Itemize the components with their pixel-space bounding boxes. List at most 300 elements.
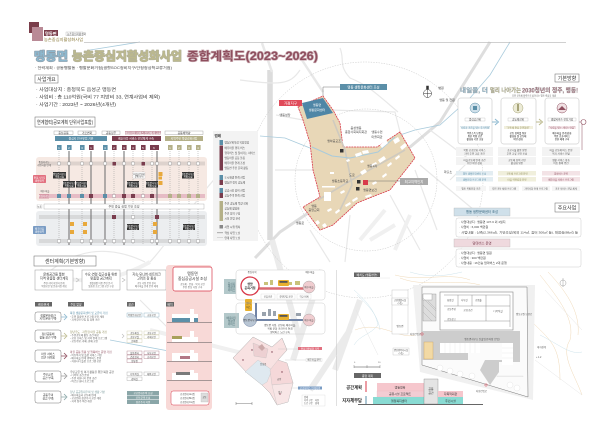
upper route box: 학교 연계 bbox=[299, 294, 309, 298]
county map: 금왕 bbox=[277, 377, 282, 381]
header logo: 농촌중심지활성화사업 bbox=[44, 37, 84, 42]
upper black label boxes: 복합시설 bbox=[184, 174, 192, 178]
row 2 bbox=[35, 330, 159, 343]
stack left bbox=[373, 383, 424, 404]
place names: 맹동초등학교 bbox=[332, 178, 349, 183]
upper black label boxes: 주민조직 bbox=[135, 174, 143, 178]
icon: bus bbox=[278, 314, 289, 320]
row 3: 마을 서비스 bbox=[41, 352, 55, 356]
lower route box: 맹동면사무소 bbox=[243, 318, 258, 322]
concept box 2 bbox=[82, 270, 120, 290]
upper route box: 배후마을 bbox=[306, 270, 315, 274]
chart bands bbox=[39, 162, 205, 243]
label: base district: 거점지구 bbox=[284, 101, 298, 106]
column headers bbox=[54, 131, 203, 141]
concept box 2: 생활권별 이용 주민 분석 bbox=[89, 281, 113, 285]
heading bbox=[354, 373, 381, 378]
panel: site plan bbox=[354, 272, 582, 400]
row 3: 정류장 bbox=[131, 359, 139, 363]
column headers: 공동체역량 bbox=[178, 131, 191, 135]
project details 1 bbox=[456, 218, 581, 237]
top number tags: 3 bbox=[81, 146, 83, 150]
site plan map: project area bbox=[279, 84, 455, 230]
main building: 공용홀 bbox=[475, 298, 482, 302]
card 1: 활성화 기반 조성 bbox=[467, 137, 483, 141]
legend entries: 맹동면 주민 문화 활동 bbox=[224, 166, 249, 170]
adjacent building: 맹동면 bbox=[397, 324, 404, 328]
column headers: 중심지 인구유입 기반 bbox=[69, 136, 94, 140]
legend entries: 맹동면 행복 공동체 bbox=[224, 180, 246, 184]
slogan: 2030청년의 정주, 맹동! bbox=[522, 86, 578, 94]
panel: center plan bbox=[34, 256, 212, 410]
legend panel bbox=[213, 131, 258, 241]
small labels: upper rows bbox=[37, 160, 51, 198]
baseline bbox=[358, 403, 483, 406]
site parcel bbox=[422, 287, 528, 397]
row 3: - 커뮤니티 돌봄 프로그램 공간 bbox=[70, 359, 102, 363]
label: base district bbox=[279, 100, 302, 106]
site plan map: project area: 생활문화센터 bbox=[309, 107, 326, 112]
legend entries: 공동체 활성화 bbox=[224, 206, 240, 210]
project details 2: · 사업비 : 300 백만원 bbox=[459, 255, 486, 260]
card 2 bbox=[501, 98, 536, 144]
row 4: 다목적실 bbox=[130, 372, 139, 376]
upper route box: 문화거점 bbox=[244, 285, 256, 290]
center concept box: 맹동면 bbox=[187, 271, 198, 276]
side label: upper: 중심시가지 bbox=[34, 176, 45, 180]
title: 농촌중심지활성화사업 bbox=[72, 49, 182, 63]
row 5: - 지역 정주 여건 개선 bbox=[70, 399, 93, 403]
row 4: 체육공간 bbox=[147, 372, 157, 376]
row 3: 사무공간 bbox=[147, 351, 157, 355]
overview text: · 사업기간 : 2023년 ~ 2026년(4개년) bbox=[36, 101, 117, 108]
legend entries: 시설 운영 관리 bbox=[224, 216, 241, 220]
side label: lower: 생활권역 bbox=[35, 230, 44, 234]
legend entries: 맹동문화복합 복합행정 bbox=[224, 140, 250, 144]
tag: rear service: 생활권 bbox=[228, 319, 236, 323]
heading: linkage plan: 연계협력(공모계획 단위사업포함) bbox=[37, 119, 93, 126]
overview text: · 사업대상지 : 충청북도 음성군 맹동면 bbox=[36, 86, 116, 93]
lower route box: 복합 문화 공간으로 연결 bbox=[267, 326, 293, 330]
card 2: 활성화 및 공동체 bbox=[510, 134, 526, 138]
top number tags: 4 bbox=[132, 146, 134, 150]
upper black label boxes: 복합시설 bbox=[55, 174, 64, 178]
panel: basic direction bbox=[456, 74, 586, 191]
scale bar bbox=[236, 402, 252, 405]
place names bbox=[279, 85, 455, 225]
row 4: 주민교류 및 여가 활동을 위한 복합 공간 bbox=[70, 370, 115, 374]
legend entries: 도시재생 연계 사업 bbox=[224, 176, 246, 180]
direction boxes: 활성화 방안 bbox=[511, 161, 524, 165]
direction boxes: 공공시설 활용 방안 bbox=[507, 148, 528, 152]
small labels: upper rows: 중심지기능 bbox=[38, 194, 50, 198]
heading: 종합 계획 bbox=[362, 374, 373, 378]
upper band nodes bbox=[57, 162, 200, 198]
row 2: - 주민공동체 활동 공간 제공 bbox=[70, 333, 100, 337]
upper black label boxes: 복합시설 bbox=[129, 184, 137, 188]
middle white bar: 주민 중심 실행 기반 조성 bbox=[109, 204, 140, 209]
action rows: 생활문화 프로그램 운영 bbox=[463, 177, 486, 181]
action rows: 맹동 생활문화센터 조성 bbox=[463, 171, 486, 175]
bus link tag: 맘마 bbox=[246, 301, 251, 305]
title: 맹동면 bbox=[34, 50, 68, 63]
tag: center service bbox=[224, 279, 239, 294]
small labels: upper rows: 배후마을 bbox=[41, 189, 50, 193]
concept box 3: 배후마을 연계 운영 체계 bbox=[135, 284, 158, 288]
side label: upper bbox=[33, 175, 46, 183]
place names: 맹하공교조 bbox=[327, 138, 341, 143]
row 5: 청년 공공임대주택 및 생활 기반 bbox=[70, 390, 106, 394]
row 1: - 지역주민 모임 및 회의 공간 bbox=[70, 318, 100, 322]
stack center: 공동 bbox=[428, 387, 434, 391]
heading: linkage plan bbox=[35, 117, 95, 127]
lower route box: 배후마을 bbox=[304, 318, 314, 322]
concept box 2: 맞춤형 프로그램 공간 구성 bbox=[88, 284, 114, 288]
legend entries: 주민 협의 구성 bbox=[224, 212, 241, 216]
top number tags: 3 bbox=[188, 146, 190, 150]
project details 1: · 사업대상지 : 맹동면 137-6 외 4필지 bbox=[459, 219, 506, 224]
row 4 bbox=[35, 370, 159, 383]
row 5: 공공임대주택 조성 bbox=[133, 391, 153, 395]
concept box 1: 문화공간을 통한 bbox=[43, 272, 65, 276]
column headers: 중심공동 bbox=[58, 131, 69, 135]
label: highest area bbox=[368, 178, 428, 185]
housing summary box: 공동 bbox=[202, 395, 207, 399]
legend panel: 범례 bbox=[214, 133, 221, 138]
contour lines bbox=[354, 272, 582, 395]
icon: site north bbox=[560, 278, 566, 287]
housing summary box bbox=[171, 391, 209, 405]
project band 2: 맘마버스 운영 bbox=[472, 240, 492, 246]
main building: 공유공간 bbox=[463, 308, 473, 312]
direction boxes: 복지 서비스 전달 bbox=[552, 152, 570, 156]
row 2: 활동 공간 부족 bbox=[40, 336, 57, 340]
map callouts: 배후마을권역 bbox=[307, 358, 321, 362]
upper route box: 생활 bbox=[247, 281, 253, 286]
top number tags: 4 bbox=[197, 146, 199, 150]
place names: 마을회관 bbox=[371, 134, 383, 139]
site plan labels: 차량진입로 bbox=[410, 332, 422, 336]
row 4: 주민교류 bbox=[43, 372, 54, 376]
place names: 맹동로 bbox=[296, 220, 304, 225]
row 4: 강의실 bbox=[131, 377, 138, 381]
row 1 bbox=[35, 311, 159, 322]
lower labels: 맹동면사무소 bbox=[182, 224, 196, 228]
row 2: 청년공동체 bbox=[42, 332, 55, 336]
tag: center service: 서비스 bbox=[228, 288, 236, 292]
row 1: 복합 생활문화센터 및 교류의 거점 bbox=[70, 311, 108, 315]
tag: rear service: 배후마을 bbox=[227, 316, 237, 320]
upper black label boxes: 마을공동체 bbox=[134, 172, 144, 176]
concept arrow 1 bbox=[76, 278, 79, 282]
overview text: · 사업비 : 총 110억원(국비 77 지방비 33, 연계사업비 제외) bbox=[36, 94, 161, 100]
main building: 화장실 bbox=[447, 298, 454, 302]
card 2: 역량 강화 bbox=[513, 137, 524, 141]
heading: center plan bbox=[34, 256, 96, 266]
side label: local budget: 지자체부담 bbox=[342, 397, 362, 404]
housing summary box: 공공임대 B타입 bbox=[180, 396, 195, 400]
perimeter roads bbox=[413, 285, 535, 400]
parking area: 맹동면사무소 진출입(주차장 진입) bbox=[464, 337, 500, 341]
overview text bbox=[36, 86, 161, 108]
title bbox=[34, 49, 318, 63]
map legend: 지역 구분 bbox=[304, 398, 313, 402]
top number tags: 2 bbox=[113, 146, 115, 150]
upper black label boxes: 맹동면사무소 bbox=[62, 181, 76, 185]
upper black label boxes: 맹동면사무소 bbox=[126, 181, 140, 185]
direction boxes: 마을공동체 연계 공간 bbox=[463, 158, 486, 162]
direction boxes bbox=[456, 147, 580, 165]
main building bbox=[440, 292, 513, 330]
card 2: 공동 참여를 통한 bbox=[510, 131, 527, 135]
upper pink panel bbox=[36, 157, 207, 201]
row 1: 지역 문화 부족 bbox=[40, 317, 57, 321]
upper black label boxes bbox=[53, 172, 195, 188]
tag: center service: 중심지 bbox=[228, 282, 236, 286]
column labels: 배경/문제 bbox=[38, 302, 49, 306]
county map: 생극 bbox=[278, 390, 282, 394]
tag: center service: 생활권 bbox=[228, 285, 236, 289]
legend entries: 행복버스 및 찾아가는 서비스 bbox=[224, 151, 256, 155]
concept box 1 bbox=[35, 270, 73, 290]
row 5: - 공공임대 청년주거 공간 계획 bbox=[70, 396, 101, 400]
place names: 맹동수련 bbox=[371, 129, 383, 134]
small labels: upper rows: 중심지기능 bbox=[38, 160, 50, 164]
upper route box: 중심지역 bbox=[248, 270, 256, 274]
place names: 음성맹동 bbox=[350, 125, 362, 130]
arrow 1 bbox=[492, 119, 498, 125]
concept arrow 3 bbox=[168, 278, 171, 282]
background map roads and rivers bbox=[40, 42, 510, 390]
action rows: 배후마을 서비스 프로그램 bbox=[548, 177, 574, 181]
title: 종합계획도(2023~2026) bbox=[187, 49, 318, 63]
top number tags: 5 bbox=[142, 146, 144, 150]
legend entries: 배후마을 행복 버스 bbox=[224, 146, 246, 150]
main building: 사무실 bbox=[461, 298, 468, 302]
row 5: 공동주택 bbox=[43, 393, 54, 397]
map callouts: 중심지활성화 지역 bbox=[301, 346, 319, 350]
site plan labels: 맹동공원 보행로 bbox=[516, 312, 533, 316]
row 3: - 배후마을 연계 행복버스 운영 bbox=[70, 356, 101, 360]
slogan: 멀리 나아가는 bbox=[490, 86, 521, 94]
card 1: 주민소득 보장을 bbox=[467, 131, 484, 135]
map legend: 도로 구분 bbox=[304, 401, 313, 405]
direction boxes: 마을 공동체 버스 운영 bbox=[550, 148, 572, 152]
header logo: 농촌중심지활성화 bbox=[67, 32, 87, 36]
place names: 중앙교회 bbox=[308, 207, 320, 212]
concept box 2: 수요·연령·접근성을 위한 bbox=[85, 272, 117, 276]
card 3 bbox=[545, 98, 579, 144]
legend entries: 핵심 사업 노선 bbox=[224, 231, 241, 235]
place names: 맹동면보건 bbox=[363, 187, 377, 192]
solar hatch block bbox=[423, 294, 436, 321]
direction boxes: 복합 공공문화 서비스 bbox=[463, 148, 486, 152]
map legend bbox=[302, 395, 325, 406]
column labels: 주요 방향 bbox=[70, 302, 82, 306]
scale bbox=[354, 362, 381, 368]
card 1: 위한 복합 공간 bbox=[468, 134, 483, 138]
action rows: 공공 서비스 전달 체계 bbox=[555, 186, 577, 190]
action rows: 마을 역량강화 운영 bbox=[508, 177, 526, 181]
column headers: 배후마을 서비스 전달체계 구축 bbox=[125, 131, 161, 135]
card 1 bbox=[458, 98, 492, 144]
row 2: 공동체실 bbox=[130, 331, 139, 335]
concept box 3 bbox=[127, 270, 166, 290]
connector loop bbox=[579, 122, 582, 150]
heading: center plan: 센터계획(기본방향) bbox=[45, 258, 85, 265]
label: center: 맹동 생활문화센터 조성 bbox=[347, 84, 380, 89]
slogan: 내일을, 더 bbox=[460, 86, 488, 94]
top number tags: 1 bbox=[58, 146, 60, 150]
housing summary box: 공공임대 A타입 bbox=[180, 392, 195, 396]
legend entries: 배후마을 연계 조성 bbox=[224, 161, 246, 165]
area polygon bbox=[298, 96, 415, 230]
side label: lower bbox=[33, 226, 46, 234]
action rows bbox=[456, 171, 580, 191]
site plan labels: + 1.2 bbox=[536, 356, 542, 359]
concept box 2: 맞춤형 공간계획 bbox=[90, 276, 112, 280]
main building: 다목적실 bbox=[493, 309, 503, 313]
concept arrow 2 bbox=[122, 278, 125, 282]
concept box 1: 지역 맞춤형 센터계획 bbox=[40, 276, 68, 280]
concept box 1: 복합공간 및 문화거점 계획 bbox=[41, 284, 67, 288]
tag: rear service: 서비스 bbox=[228, 322, 236, 326]
action rows: 주민 공동 체험 프로그램 bbox=[492, 186, 516, 190]
column labels: 공간 bbox=[128, 302, 134, 306]
stack left: 공유시설 프로젝트 bbox=[389, 391, 411, 396]
legend entries: 공공시설 정비 사업 bbox=[224, 188, 246, 192]
slogan bbox=[460, 86, 578, 94]
side label: lower: 배후마을 bbox=[35, 226, 45, 230]
upper black label boxes: 복합시설 bbox=[77, 184, 86, 188]
heading: site plan: 배치도 (맹동면안) bbox=[357, 273, 377, 277]
label: center bbox=[323, 84, 387, 96]
lower labels: 복합시설 bbox=[185, 226, 193, 230]
row 5: - 배후마을과 공동체 연계 bbox=[70, 393, 97, 397]
vertical divider bbox=[335, 270, 338, 406]
panel: service network diagram bbox=[224, 270, 325, 334]
side label: local budget bbox=[342, 396, 366, 404]
project band 1: 맹동 생활문화센터 조성 bbox=[466, 209, 498, 214]
card 2: 공동체강화 bbox=[512, 118, 525, 122]
parking area bbox=[422, 331, 520, 385]
county map: 음성읍 bbox=[260, 362, 266, 366]
lower route box: 맹동면 거점, 공동체, 배후마을, bbox=[264, 323, 296, 327]
concept box 3: 공동 거점 운영 관리 bbox=[137, 281, 156, 285]
row 4: - 어르신 쉼터 프로그램 bbox=[70, 379, 94, 383]
adjacent building: 면단위복지시설 bbox=[394, 348, 408, 352]
concept box 3: 고려의 장 중심 bbox=[137, 276, 156, 280]
upper route box: 공유공간 bbox=[264, 294, 273, 298]
action rows: 지역사회 연계 프로그램 bbox=[524, 186, 548, 190]
stack left: 행정복지센터 bbox=[391, 398, 407, 403]
row 2: - 공동주방, 카페, 판매 공간 bbox=[70, 339, 99, 343]
housing summary box: 공공임대 C타입 bbox=[180, 400, 195, 404]
direction boxes: 공동체 참여 기반 bbox=[508, 158, 526, 162]
row 4: - 다목적 공간 운영 bbox=[70, 373, 89, 377]
row 1: 복합문화공간 bbox=[128, 313, 142, 317]
top number tags: 3 bbox=[123, 146, 125, 150]
card 1: "사람과 공간을 잇는 주거복합" bbox=[460, 126, 490, 130]
card 1: 중심공간화 bbox=[469, 118, 482, 122]
scale: 0 bbox=[354, 362, 356, 364]
project details 2: · 사업대상지 : 맹동면 일원 bbox=[459, 250, 492, 255]
building diagrams bbox=[167, 309, 212, 380]
panel: main projects bbox=[454, 203, 581, 267]
row 3: 접근 어려움 bbox=[41, 356, 55, 360]
row 2: 청년주도 · 자립형 마을 공동 거점 bbox=[70, 330, 107, 334]
direction boxes: 생활 서비스 확충 bbox=[552, 158, 570, 162]
stack center bbox=[424, 379, 438, 404]
stack right bbox=[438, 391, 463, 404]
upper black label boxes: 복합시설 bbox=[148, 184, 156, 188]
map callouts: 공공서비스 연계지역 bbox=[300, 386, 320, 390]
label: highest area: 최고지역인지 bbox=[405, 179, 423, 184]
header rule bbox=[84, 41, 566, 44]
site plan map: project area: 맹동면 bbox=[313, 102, 321, 107]
place names: 맹동 bbox=[311, 203, 317, 208]
card 2: "공동체 중심 주민화합" bbox=[507, 126, 530, 130]
column labels: 배치 bbox=[167, 302, 173, 306]
card 3: "사람을 잇는 서비스 연결" bbox=[549, 126, 575, 130]
place names: 파출소 bbox=[444, 169, 452, 174]
direction boxes: 주민 역량 강화 bbox=[467, 161, 483, 165]
top number tags: 6 bbox=[153, 146, 155, 150]
column headers: 공동정주 bbox=[106, 131, 117, 135]
row 3: 건강관리 bbox=[130, 355, 139, 359]
panel: linkage schedule chart bbox=[33, 117, 207, 246]
upper route box bbox=[236, 270, 325, 300]
scale: 20 bbox=[378, 362, 381, 364]
upper black label boxes: 맹동면사무소 bbox=[145, 181, 159, 185]
header logo bbox=[29, 22, 87, 42]
legend entries: 사업 시행 위치 bbox=[224, 225, 241, 229]
lower labels: 맹동면사무소 bbox=[126, 224, 140, 228]
site plan labels: 대지경계 bbox=[537, 345, 546, 349]
panel: funding stack bbox=[342, 373, 483, 405]
side label: upper: 생활권역 bbox=[35, 178, 44, 182]
legend entries: 맹동마을 공동 돌봄 bbox=[224, 156, 246, 160]
project details 1: · 사업비 : 6,000 백만원 bbox=[459, 224, 488, 229]
legend entries: 공동주택 연계 사업 bbox=[224, 194, 246, 198]
upper route box: 주민모임 공간 bbox=[279, 294, 294, 298]
row 5: 공동주택 조성 bbox=[136, 396, 150, 400]
adjacent building bbox=[392, 290, 409, 355]
middle white bar: 농촌 bbox=[37, 205, 42, 209]
row 2: - 공유 오피스 및 지역 연계 프로그램 bbox=[70, 336, 108, 340]
middle white bar bbox=[37, 204, 204, 209]
project details 2: · 사업내용 : 16인승 맘마버스 2대 운행 bbox=[459, 260, 507, 265]
place names: 맹동1리 bbox=[367, 163, 377, 168]
access markers bbox=[421, 333, 487, 386]
column lines bbox=[59, 151, 198, 245]
lower grey panel bbox=[36, 211, 207, 246]
bus link tag: 버스 bbox=[246, 305, 251, 309]
place names: 맹동 및 전원 bbox=[439, 97, 455, 102]
center concept box bbox=[173, 267, 212, 291]
row 4: 공간 부족 bbox=[42, 376, 54, 380]
action rows: 맘마버스 운영 bbox=[554, 171, 568, 175]
adjacent building: 근린생활시설 bbox=[394, 298, 406, 302]
adjacent building: (1층) bbox=[398, 301, 403, 305]
place names: 맹동성당 bbox=[279, 112, 291, 117]
lower route box: 행복버스 노선 구축 bbox=[270, 330, 291, 334]
map legend: 경계 bbox=[315, 401, 319, 405]
row 1: 생활문화공간 bbox=[40, 314, 56, 318]
direction boxes: 지역 주민 교류 공간 bbox=[464, 152, 485, 156]
column labels bbox=[35, 302, 174, 306]
legend entries: 연계 사업 노선 bbox=[224, 236, 241, 240]
